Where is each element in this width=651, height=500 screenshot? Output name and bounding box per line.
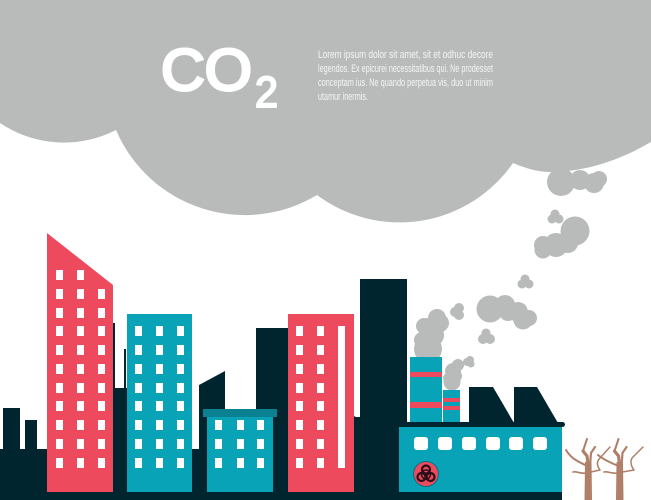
icon: biohazard — [414, 462, 438, 486]
small chimney — [443, 390, 460, 423]
sawtooth roof — [469, 387, 558, 423]
title: CO2: CO — [161, 38, 252, 103]
smoke puffs — [414, 168, 607, 390]
text block: description: Lorem ipsum dolor sit amet, sit et odhuc decore — [318, 49, 493, 61]
large chimney — [410, 357, 442, 423]
building: low teal block — [203, 409, 277, 492]
bare trees — [566, 439, 643, 500]
text block: description — [318, 49, 493, 103]
text block: description: legendos. Ex epicurei necessitatibus qui. Ne prodesset — [318, 63, 493, 75]
tree right — [598, 439, 643, 500]
text block: description: conceptam ius. Ne quando perpetua vis, duo ut minim — [318, 77, 493, 89]
building: red block with stripe — [288, 314, 354, 492]
title: CO2 — [161, 38, 278, 117]
title: CO2: 2 — [255, 68, 278, 117]
dark background skyline — [0, 279, 562, 500]
text block: description: utamur inermis. — [318, 91, 368, 103]
tree left — [566, 439, 610, 500]
roof bar — [399, 422, 565, 427]
factory body — [399, 427, 562, 492]
CO2 cloud — [0, 0, 651, 222]
factory windows — [414, 437, 547, 450]
building: red tower — [47, 233, 113, 492]
building: teal tower — [127, 314, 192, 492]
factory — [399, 357, 565, 492]
